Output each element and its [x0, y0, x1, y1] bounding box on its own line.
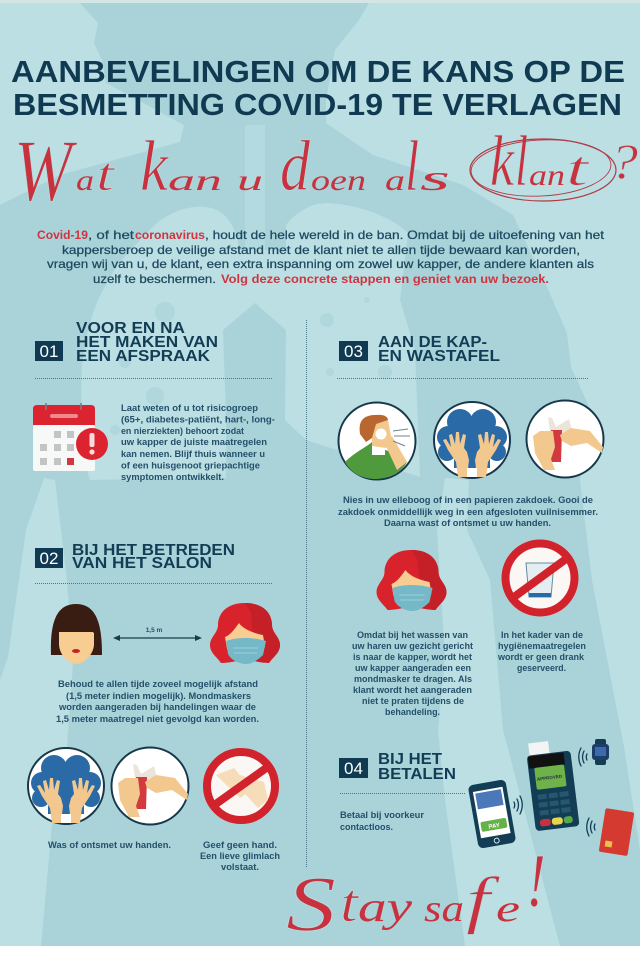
stay safe script: S — [286, 860, 336, 947]
icon: calendar alert — [33, 403, 108, 471]
caption: no handshake: Geef geen hand. — [203, 839, 277, 850]
section 03 text: Daarna wast of ontsmet u uw handen. — [384, 517, 551, 528]
section 04 text — [340, 809, 424, 832]
mask explanation text: behandeling. — [385, 706, 440, 717]
section 01 heading: HET MAKEN VAN — [76, 334, 218, 351]
icon: no drinks — [506, 544, 574, 612]
stay safe script: e — [496, 888, 520, 930]
title: AANBEVELINGEN OM DE KANS OP DE — [11, 54, 625, 89]
mask explanation text: uw kapper aangeraden een — [355, 662, 471, 673]
caption: no handshake: volstaat. — [221, 861, 259, 872]
intro text: coronavirus — [135, 228, 205, 242]
section 01 text: uw kapper de juiste maatregelen — [121, 436, 267, 447]
mask explanation text: uw haren uw gezicht gericht — [352, 640, 473, 651]
caption: no handshake: Een lieve glimlach — [200, 850, 280, 861]
stay safe script: f — [466, 864, 501, 935]
section 02 heading — [35, 542, 235, 572]
script subtitle: oen — [311, 164, 366, 197]
stay safe script: ay — [358, 885, 412, 931]
script subtitle: a — [76, 164, 94, 197]
section 01 heading: EEN AFSPRAAK — [76, 348, 211, 365]
section 03 text: Nies in uw elleboog of in een papieren zakdoek. Gooi de — [343, 494, 593, 505]
section 02 heading: VAN HET SALON — [72, 555, 212, 572]
title: BESMETTING COVID-19 TE VERLAGEN — [13, 87, 622, 122]
stay safe script: sa — [424, 888, 464, 930]
script subtitle: u — [237, 164, 263, 197]
icon: no handshake — [207, 752, 275, 820]
mask explanation text: Omdat bij het wassen van — [357, 629, 468, 640]
section 03 heading: 03 — [344, 342, 363, 361]
section 01 heading: 01 — [40, 342, 58, 361]
section 01 text: (65+, diabetes-patiënt, hart-, long- — [121, 414, 275, 424]
script subtitle: d — [280, 126, 311, 206]
icon: hand sanitizer — [112, 748, 188, 824]
section 02 text: Behoud te allen tijde zoveel mogelijk afstand — [58, 678, 258, 689]
section 03 text — [338, 494, 598, 528]
icon: red haired face with mask — [210, 603, 280, 664]
section 03 heading — [339, 334, 500, 365]
section 01 text: en nierziekten) behoort zodat — [121, 425, 244, 436]
icon: hand sanitizer — [526, 400, 604, 478]
stay safe script: t — [340, 873, 360, 933]
section 02 heading: BIJ HET BETREDEN — [72, 542, 235, 559]
icon: washing hands — [434, 402, 510, 478]
section 03 heading: AAN DE KAP- — [378, 334, 487, 351]
intro text: vragen wij van u, de klant, een extra inspanning om zowel uw kapper, de andere klanten als — [47, 257, 594, 271]
mask explanation text: is naar de kapper, wordt het — [353, 651, 472, 662]
section 01 heading — [35, 320, 218, 365]
section 04 text: contactloos. — [340, 821, 393, 832]
script subtitle: an — [168, 164, 222, 197]
icon: credit card — [587, 808, 634, 856]
title — [11, 54, 625, 122]
script subtitle: l — [405, 126, 419, 206]
icon: red haired face with mask — [376, 550, 446, 611]
script subtitle: ? — [610, 133, 638, 189]
mask explanation text: mondmasker te dragen. Als — [354, 673, 472, 684]
section 02 heading: 02 — [40, 549, 58, 568]
section 04 heading — [339, 751, 456, 783]
intro text: kappersberoep de veilige afstand met de klant niet te allen tijde bewaard kan worden, — [62, 243, 580, 257]
intro text: Covid-19 — [37, 228, 88, 242]
intro text: , of het — [88, 228, 135, 242]
stay safe script: ! — [526, 839, 546, 923]
section 03 heading: EN WASTAFEL — [378, 348, 500, 365]
arrow: 1,5 m distance: 1,5 m — [146, 627, 163, 634]
drinks explanation text — [497, 629, 586, 673]
script subtitle — [14, 121, 638, 220]
section 02 text: 1,5 meter maatregel niet gevolgd kan worden. — [56, 713, 259, 724]
script subtitle: s — [420, 158, 450, 198]
icon: sneezing man — [338, 402, 416, 480]
section 04 text: Betaal bij voorkeur — [340, 809, 424, 820]
script subtitle: k — [490, 121, 516, 201]
section 04 heading: BIJ HET — [378, 751, 443, 768]
drinks explanation text: geserveerd. — [517, 662, 566, 673]
script subtitle: t — [566, 140, 590, 196]
script subtitle: k — [140, 126, 170, 206]
caption: no handshake — [200, 839, 280, 872]
script subtitle: l — [515, 121, 528, 201]
section 02 text — [56, 678, 259, 724]
stay safe script — [286, 839, 546, 947]
mask explanation text — [352, 629, 473, 717]
icon: payment terminal — [525, 739, 580, 831]
section 01 text — [121, 402, 275, 482]
mask explanation text: klant wordt het aangeraden — [353, 684, 472, 695]
intro text: uzelf te beschermen. — [93, 272, 216, 286]
icon: smartwatch — [579, 739, 609, 766]
section 04 heading: BETALEN — [378, 766, 456, 783]
script subtitle: W — [14, 123, 77, 220]
section 02 text: worden aangeraden bij handelingen waar de — [58, 701, 256, 712]
icon: washing hands — [28, 748, 104, 824]
section 01 text: of een huisgenoot griepachtige — [121, 460, 260, 470]
section 01 text: kan nemen. Blijf thuis wanneer u — [121, 448, 265, 459]
caption: wash hands: Was of ontsmet uw handen. — [48, 839, 171, 850]
script subtitle: a — [385, 164, 405, 197]
icon: phone payment: PAY — [488, 823, 500, 831]
icon: brown haired face — [51, 604, 102, 664]
drinks explanation text: In het kader van de — [501, 629, 583, 640]
section 02 text: (1,5 meter indien mogelijk). Mondmaskers — [66, 690, 251, 701]
section 01 text: symptomen ontwikkelt. — [121, 471, 224, 482]
script subtitle: t — [96, 148, 116, 201]
section 01 heading: VOOR EN NA — [76, 320, 185, 337]
script subtitle: an — [529, 159, 565, 192]
intro text — [37, 228, 605, 286]
drinks explanation text: hygiënemaatregelen — [498, 640, 586, 651]
arrow: 1,5 m distance — [113, 627, 202, 641]
drinks explanation text: wordt er geen drank — [497, 651, 585, 662]
intro text: Volg deze concrete stappen en geniet van uw bezoek. — [221, 272, 549, 286]
icon: phone payment — [468, 779, 522, 849]
intro text: , houdt de hele wereld in de ban. Omdat bij de uitoefening van het — [205, 228, 605, 242]
section 03 text: zakdoek onmiddellijk weg in een afgesloten vuilnisemmer. — [338, 506, 598, 517]
icon: payment terminal: APPROVED — [537, 774, 563, 782]
section 04 heading: 04 — [344, 759, 363, 778]
mask explanation text: niet te praten tijdens de — [362, 695, 464, 706]
section 01 text: Laat weten of u tot risicogroep — [121, 402, 258, 413]
